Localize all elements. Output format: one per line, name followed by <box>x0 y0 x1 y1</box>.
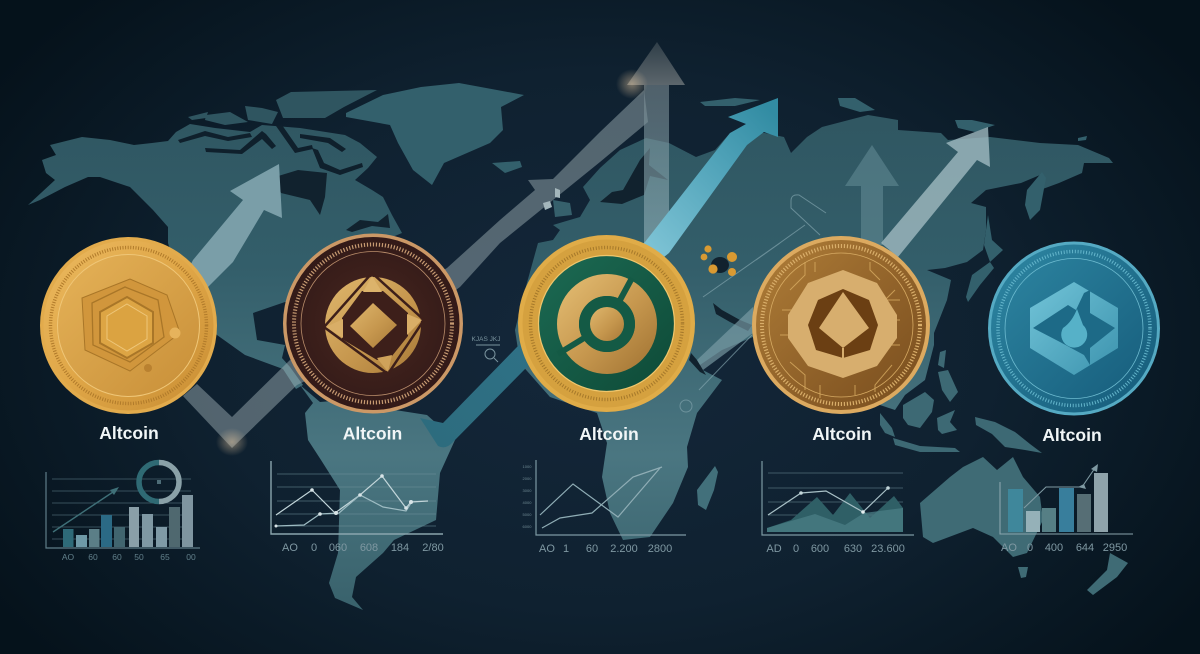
axis labels <box>282 542 444 554</box>
small label text: KJAS JKJ <box>472 336 500 343</box>
coin 5 emblem <box>1030 282 1118 375</box>
chart: line chart 3 <box>523 460 686 555</box>
arrow: first teal trend arrow <box>182 164 282 300</box>
chart: line chart 2 <box>271 461 444 554</box>
map: British Isles <box>543 188 572 217</box>
arrow shaft <box>644 84 669 244</box>
axis labels: 608 <box>360 542 378 554</box>
map: Canadian islands <box>188 90 377 125</box>
map: North and Central America <box>28 124 402 389</box>
axis labels: 00 <box>186 552 196 562</box>
axis labels: 23.600 <box>871 543 905 555</box>
axis labels <box>62 552 196 562</box>
icon: small ring marker <box>680 400 692 412</box>
axis labels: 400 <box>1045 542 1063 554</box>
donut chart <box>139 462 179 502</box>
axis labels: 60 <box>586 543 598 555</box>
axis labels: 0 <box>793 543 799 555</box>
y ticks: 6000 <box>523 524 532 529</box>
coin 4: bronze octagon <box>752 236 930 414</box>
coin 4 emblem <box>788 270 897 378</box>
axis labels: 060 <box>329 542 347 554</box>
map: Eurasia and Africa <box>515 115 1113 540</box>
axis labels: 60 <box>112 552 122 562</box>
axis labels: 2.200 <box>610 543 638 555</box>
map: Madagascar <box>697 466 718 510</box>
chart bars <box>63 495 193 547</box>
axis labels: 2950 <box>1103 542 1127 554</box>
axis labels: 50 <box>134 552 144 562</box>
axis labels: 1 <box>563 543 569 555</box>
map: Hudson Bay <box>275 170 327 215</box>
map: New Zealand <box>1087 553 1128 595</box>
axis labels: 600 <box>811 543 829 555</box>
axis labels: 630 <box>844 543 862 555</box>
axis labels: 184 <box>391 542 409 554</box>
arrow: grey zig-zag trend arrow <box>183 90 648 448</box>
map: Philippines and Indonesia <box>880 350 1042 453</box>
coin 2: brown diamond <box>283 234 463 414</box>
arrow: blue trend arrow <box>420 98 778 447</box>
trend arrow <box>53 487 119 532</box>
line <box>768 486 890 515</box>
sketch: pin outline and lines <box>699 195 826 390</box>
y ticks: 3000 <box>523 488 532 493</box>
axis labels: 2800 <box>648 543 672 555</box>
map: Arctic channels <box>178 125 363 175</box>
axis labels: AO <box>282 542 298 554</box>
label: coin 3: Altcoin <box>579 424 639 444</box>
coin 1: gold hexagon <box>40 237 217 414</box>
glow: arrow vertex <box>216 428 248 456</box>
y ticks <box>523 464 532 529</box>
chart: bar chart 5 <box>1000 464 1133 554</box>
bars <box>1008 473 1108 532</box>
map: Australia <box>920 457 1043 557</box>
arrow: ghost up arrow <box>845 145 899 245</box>
label: coin 4: Altcoin <box>812 424 872 444</box>
coin 3: green ring <box>518 235 695 412</box>
y ticks: 4000 <box>523 500 532 505</box>
label: coin 5: Altcoin <box>1042 425 1102 445</box>
points <box>274 474 413 528</box>
axis labels: 65 <box>160 552 170 562</box>
axis labels: 60 <box>88 552 98 562</box>
lines <box>276 476 428 526</box>
axis labels: 0 <box>311 542 317 554</box>
axis labels: AO <box>539 543 555 555</box>
icon: gold dots <box>701 245 737 276</box>
coin 5: blue hexagon <box>988 242 1160 416</box>
lines <box>540 467 662 528</box>
arrow: pale right-hand arrow <box>881 127 990 257</box>
coin 3 emblem <box>558 278 646 363</box>
axis labels: AO <box>1001 542 1017 554</box>
label: coin 1: Altcoin <box>99 423 159 443</box>
arrow head <box>627 42 685 85</box>
map: South America <box>300 385 455 610</box>
y ticks: 5000 <box>523 512 532 517</box>
coin 2 emblem <box>324 273 424 374</box>
axis labels: 2/80 <box>422 542 444 554</box>
map: Iceland <box>492 161 522 173</box>
axis labels <box>1001 542 1127 554</box>
axis labels <box>766 543 905 555</box>
chart: area chart 4 <box>762 461 914 555</box>
y ticks: 1000 <box>523 464 532 469</box>
arrow: pale lower band <box>697 307 753 370</box>
label: coin 2: Altcoin <box>343 424 402 444</box>
back area <box>767 493 903 532</box>
icon: small search label <box>472 336 500 362</box>
map: Japan and Sakhalin <box>966 172 1046 302</box>
axis labels: 0 <box>1027 542 1033 554</box>
world map <box>28 83 1128 610</box>
y ticks: 2000 <box>523 476 532 481</box>
axis labels: 644 <box>1076 542 1094 554</box>
map: Greenland <box>346 83 524 185</box>
axis labels: AO <box>62 552 75 562</box>
coin 1 emblem <box>82 279 180 372</box>
chart: bar chart 1 <box>46 462 200 562</box>
trend arrow <box>1024 464 1098 508</box>
map: inland seas <box>600 148 752 375</box>
axis labels <box>539 543 672 555</box>
arrow: vertical grey arrow <box>616 42 685 244</box>
map: Arctic islands <box>700 98 1087 141</box>
coin 4 circuit traces <box>780 262 900 398</box>
front area <box>767 508 903 532</box>
map: Tasmania <box>1018 567 1028 578</box>
axis labels: AD <box>766 543 782 555</box>
map: Gulf of St Lawrence <box>346 214 390 232</box>
